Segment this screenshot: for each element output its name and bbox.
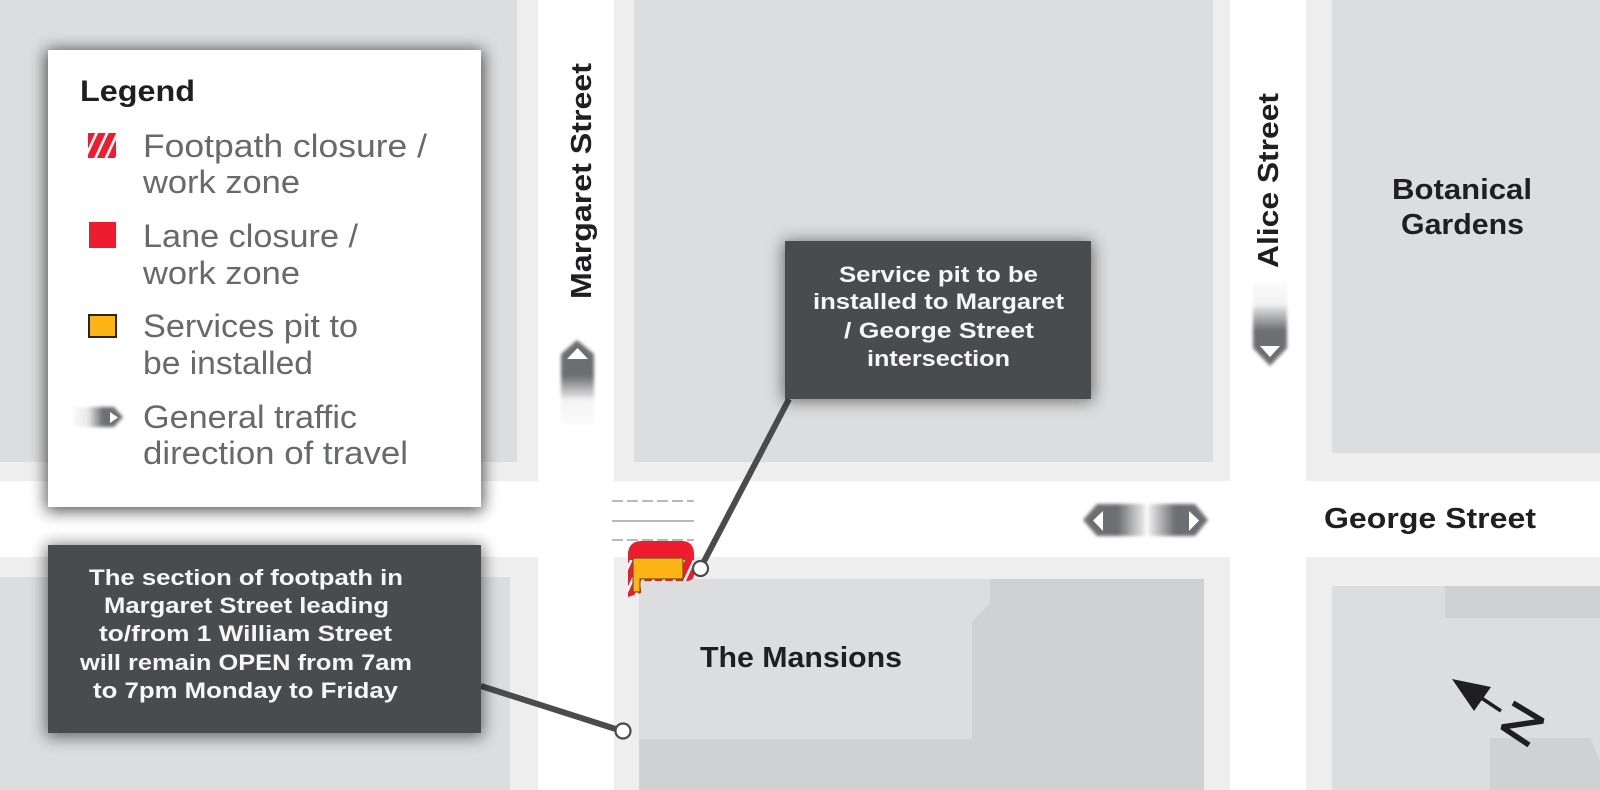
label: Botanical Gardens: Botanical [1392,174,1532,206]
legend icon: services pit [89,315,116,337]
legend text: traffic direction [143,399,408,471]
callout: service pit: Service pit to be [839,262,1038,287]
callout: footpath open hours: to 7pm Monday to Friday [93,678,399,703]
callout: service pit: / George Street [844,318,1035,343]
callout: service pit: installed to Margaret [813,289,1065,314]
work zone at intersection [628,541,694,597]
legend text: services pit [143,308,358,381]
legend text: footpath closure: Footpath closure / [143,128,427,164]
legend heading: Legend [80,75,195,108]
label: Alice Street: Alice Street [1253,93,1285,268]
legend text: lane closure [142,218,358,291]
leader line: service pit [693,399,789,576]
arrow: George Street eastbound [1148,504,1208,536]
callout: footpath open hours [46,545,483,737]
lane closure [628,541,694,560]
legend icon: lane closure [89,222,116,248]
footpath closure hatch [628,556,694,597]
callout: service pit: intersection [867,346,1010,371]
legend text: traffic direction: General traffic [143,399,357,435]
block: south east [1306,557,1600,790]
leader line: footpath [481,686,630,738]
legend text: services pit: Services pit to [143,308,358,344]
legend icon: footpath closure [88,133,116,158]
callout: footpath open hours: to/from 1 William Street [99,621,393,646]
callout: footpath open hours: Margaret Street leading [104,593,389,618]
label: The Mansions: The Mansions [700,642,902,674]
legend text: lane closure: work zone [142,255,300,291]
label: George Street: George Street [1324,503,1536,535]
label: Margaret Street: Margaret Street [566,63,598,299]
icon: north arrow [1452,679,1543,745]
block: south west [0,557,538,790]
callout: footpath open hours: The section of footpath in [89,565,403,590]
block: The Mansions [614,557,1230,790]
legend text: traffic direction: direction of travel [143,435,408,471]
callout: footpath open hours: will remain OPEN from 7am [79,650,412,675]
callout: service pit [783,241,1093,401]
legend panel [46,50,483,511]
label: Botanical Gardens [1392,174,1532,241]
legend text: lane closure: Lane closure / [143,218,358,254]
legend text: services pit: be installed [143,345,313,381]
block: north west [0,0,538,481]
block: Botanical Gardens [1306,0,1600,481]
legend icon: traffic direction [73,407,123,427]
services pit [633,558,683,592]
legend text: footpath closure: work zone [142,164,300,200]
arrow: Alice Street traffic direction [1253,282,1287,366]
arrow: George Street westbound [1083,504,1146,536]
arrow: Margaret Street traffic direction [561,340,594,425]
block: north centre [614,0,1230,481]
legend text: footpath closure [142,128,427,200]
label: Botanical Gardens: Gardens [1401,209,1524,241]
road markings [612,501,694,540]
